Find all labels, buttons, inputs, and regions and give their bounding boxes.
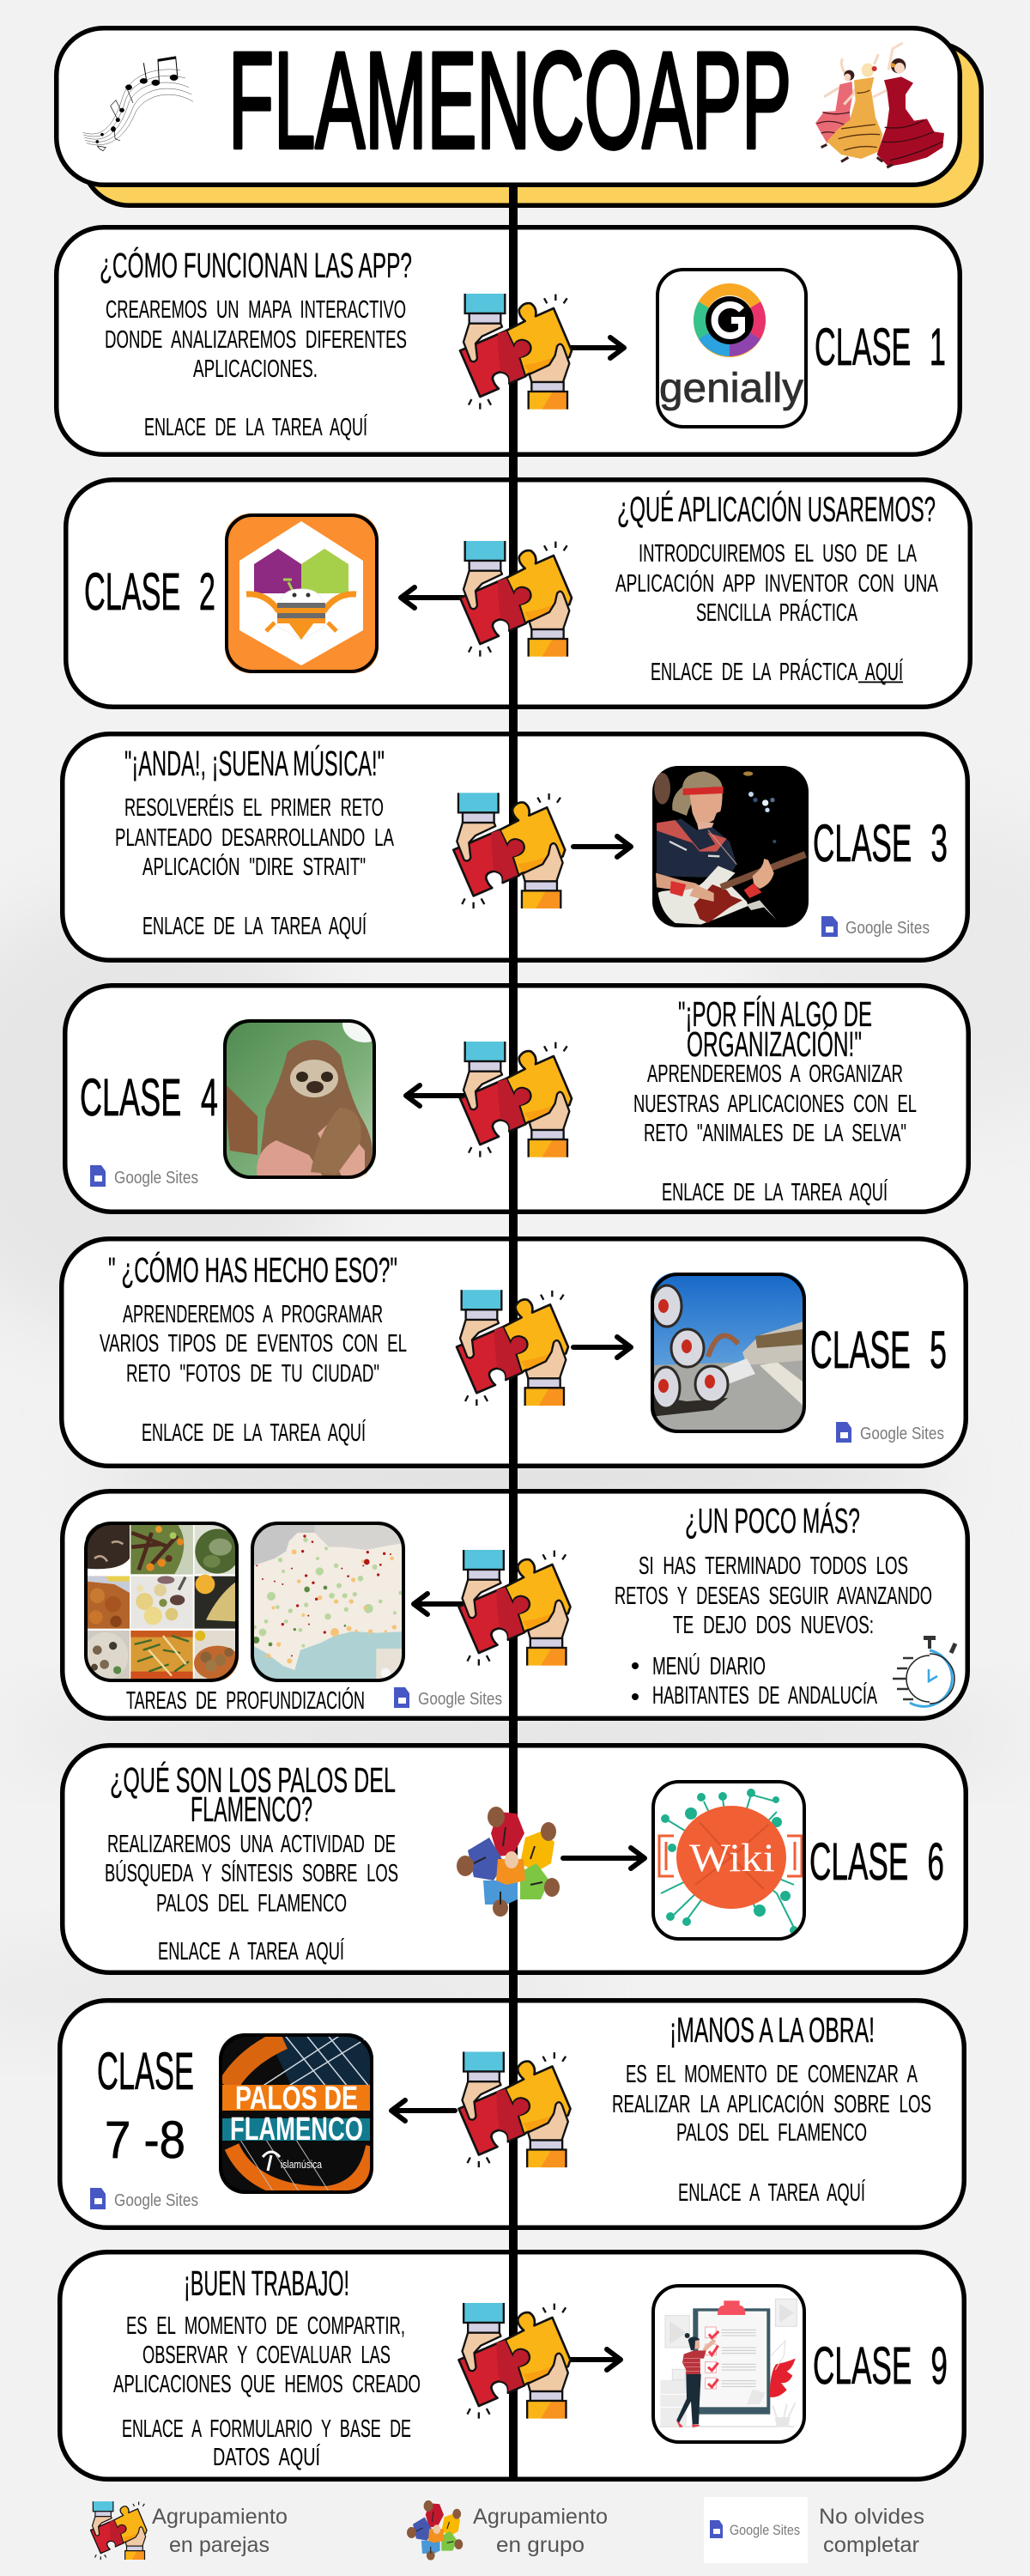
text block 6 <box>615 1552 932 1639</box>
arrow 5 <box>573 1337 631 1358</box>
text block 5 <box>100 1301 407 1388</box>
text block 9: ES EL MOMENTO DE COMPARTIR, <box>126 2312 405 2340</box>
panel 7 card <box>63 1746 966 1972</box>
arrow 8 <box>391 2100 455 2121</box>
icon: wiki logo: Wiki <box>689 1836 775 1880</box>
photo: guitarist <box>652 766 809 927</box>
text block 9: OBSERVAR Y COEVALUAR LAS <box>142 2342 391 2369</box>
header white card <box>57 28 960 185</box>
bullet list: HABITANTES DE ANDALUCÍA <box>652 1681 877 1710</box>
legend: group <box>407 2500 608 2561</box>
arrow 7 <box>563 1848 645 1868</box>
icon: flamenco dancers <box>815 43 944 167</box>
header yellow shadow <box>82 43 981 205</box>
link 8: ENLACE A TAREA AQUÍ <box>678 2178 866 2207</box>
text block 1: DONDE ANALIZAREMOS DIFERENTES <box>105 326 407 354</box>
text block 3: RESOLVERÉIS EL PRIMER RETO <box>124 793 384 822</box>
heading 7: ¿QUÉ SON LOS PALOS DEL <box>110 1760 396 1800</box>
icon: app inventor logo <box>225 513 379 673</box>
text block 8: PALOS DEL FLAMENCO <box>676 2119 867 2147</box>
icon: puzzle hands 9 <box>458 2303 570 2419</box>
image: palos de flamenco: islamúsica <box>281 2158 323 2171</box>
panel 4 card <box>65 986 968 1212</box>
icon: puzzle hands 5 <box>457 1290 568 1406</box>
text block 3: APLICACIÓN "DIRE STRAIT" <box>142 853 366 881</box>
illustration: checklist <box>651 2284 806 2444</box>
panel 3 card <box>63 734 967 960</box>
arrow 4 <box>406 1085 468 1106</box>
panel 6 card <box>63 1492 967 1718</box>
link 4: ENLACE DE LA TAREA AQUÍ <box>662 1178 888 1206</box>
text block 3 <box>115 793 394 881</box>
heading 3: "¡ANDA!, ¡SUENA MÚSICA!" <box>124 744 385 783</box>
icon: group of people <box>457 1807 560 1917</box>
text block 5: APRENDEREMOS A PROGRAMAR <box>123 1301 383 1328</box>
text block 7: REALIZAREMOS UNA ACTIVIDAD DE <box>107 1831 396 1858</box>
arrow 1 <box>566 337 624 358</box>
text block 1: APLICACIONES. <box>193 355 318 383</box>
text block 3: PLANTEADO DESARROLLANDO LA <box>115 824 394 852</box>
legend: google sites reminder: Google Sites <box>730 2522 800 2538</box>
heading 4 <box>678 994 872 1064</box>
heading 4: "¡POR FÍN ALGO DE <box>678 994 872 1034</box>
label clase 2: CLASE 2 <box>84 562 215 621</box>
timeline spine <box>509 187 518 2482</box>
icon: wiki logo <box>651 1780 806 1941</box>
panel: clase 9 <box>60 2250 964 2482</box>
legend: google sites reminder <box>704 2497 924 2563</box>
logo: google sites 5 <box>836 1422 944 1443</box>
heading 4: ORGANIZACIÓN!" <box>687 1024 862 1064</box>
text block 5: RETO "FOTOS DE TU CIUDAD" <box>126 1360 379 1388</box>
link 1: ENLACE DE LA TAREA AQUÍ <box>144 413 368 441</box>
panel: clase 5 <box>62 1236 966 1468</box>
legend: group: Agrupamiento <box>473 2505 608 2529</box>
arrow 2 <box>401 587 464 608</box>
label clases 7-8 <box>97 2042 194 2169</box>
heading 7 <box>110 1760 396 1829</box>
photo: town square <box>651 1273 806 1433</box>
label clases 7-8: 7 -8 <box>105 2111 185 2169</box>
image: palos de flamenco: PALOS DE <box>235 2081 358 2117</box>
map: andalucia <box>251 1522 405 1682</box>
link 9: ENLACE A FORMULARIO Y BASE DE <box>122 2415 411 2443</box>
panel: tareas de profundización <box>63 1489 967 1721</box>
panel: clase 4 <box>65 983 968 1214</box>
legend: pairs: Agrupamiento <box>152 2505 288 2529</box>
text block 9: APLICACIONES QUE HEMOS CREADO <box>113 2371 421 2398</box>
icon: puzzle hands 4 <box>460 1042 572 1157</box>
text block 7: PALOS DEL FLAMENCO <box>156 1890 347 1917</box>
legend: group: en grupo <box>496 2533 585 2557</box>
photo: food collage <box>83 1522 241 1682</box>
logo: google sites 4: Google Sites <box>114 1169 198 1188</box>
icon: puzzle hands 1 <box>460 294 572 410</box>
icon: stopwatch <box>893 1636 955 1706</box>
image: palos de flamenco: FLAMENCO <box>230 2111 363 2148</box>
bullet list: MENÚ DIARIO <box>652 1652 766 1680</box>
arrow 9 <box>563 2349 621 2370</box>
heading 9: ¡BUEN TRABAJO! <box>184 2263 349 2303</box>
photo: sloth <box>223 1019 376 1179</box>
legend <box>91 2497 924 2563</box>
panel 1 card <box>57 228 960 454</box>
legend: google sites reminder: No olvides <box>819 2505 924 2529</box>
logo: google sites 5: Google Sites <box>860 1425 944 1443</box>
logo: google sites 6 <box>394 1687 502 1709</box>
text block 7 <box>105 1831 398 1917</box>
legend: pairs <box>91 2501 288 2560</box>
text block 1: CREAREMOS UN MAPA INTERACTIVO <box>106 296 406 324</box>
heading 1: ¿CÓMO FUNCIONAN LAS APP? <box>100 246 412 285</box>
link 9 <box>122 2415 411 2471</box>
legend: google sites reminder: completar <box>823 2533 919 2557</box>
panel 8 card <box>60 2001 964 2227</box>
icon: puzzle hands 6 <box>458 1550 570 1666</box>
arrow 6 <box>414 1594 464 1614</box>
panel: clase 6 <box>63 1743 966 1975</box>
image: palos de flamenco <box>219 2033 373 2194</box>
heading 7: FLAMENCO? <box>191 1789 312 1829</box>
logo: google sites 8 <box>90 2188 198 2210</box>
text block 6: TE DEJO DOS NUEVOS: <box>673 1612 874 1639</box>
heading 6: ¿UN POCO MÁS? <box>685 1501 860 1540</box>
logo: google sites 3 <box>821 916 930 938</box>
text block 2 <box>615 540 938 627</box>
panel: clase 3 <box>63 732 967 963</box>
text block 8 <box>612 2061 931 2147</box>
panel: clase 2 <box>66 477 970 709</box>
text block 7: BÚSQUEDA Y SÍNTESIS SOBRE LOS <box>105 1859 398 1887</box>
heading 5: " ¿CÓMO HAS HECHO ESO?" <box>108 1250 397 1290</box>
caption: TAREAS DE PROFUNDIZACIÓN <box>126 1686 365 1715</box>
link 3: ENLACE DE LA TAREA AQUÍ <box>142 912 367 940</box>
link 9: DATOS AQUÍ <box>213 2443 321 2471</box>
text block 1 <box>105 296 407 383</box>
icon: music notes <box>83 57 193 151</box>
arrow 3 <box>573 836 631 857</box>
label clases 7-8: CLASE <box>97 2042 194 2100</box>
logo: google sites 4 <box>90 1165 198 1188</box>
icon: genially logo: genially <box>659 366 803 411</box>
text block 2: SENCILLA PRÁCTICA <box>696 598 857 627</box>
text block 9 <box>113 2312 421 2398</box>
panel 5 card <box>62 1239 966 1466</box>
logo: google sites 6: Google Sites <box>418 1690 502 1709</box>
logo: google sites 3: Google Sites <box>845 919 930 938</box>
icon: puzzle hands 2 <box>460 541 572 657</box>
text block 5: VARIOS TIPOS DE EVENTOS CON EL <box>100 1330 407 1358</box>
icon: puzzle hands 8 <box>458 2051 570 2167</box>
header banner <box>57 23 981 208</box>
label clase 4: CLASE 4 <box>80 1068 218 1127</box>
heading 8: ¡MANOS A LA OBRA! <box>670 2010 875 2050</box>
link 5: ENLACE DE LA TAREA AQUÍ <box>142 1419 367 1447</box>
logo: google sites 8: Google Sites <box>114 2191 198 2210</box>
icon: puzzle hands 3 <box>453 793 565 908</box>
panel: clases 7-8 <box>60 1998 964 2230</box>
bullet list <box>632 1652 877 1710</box>
icon: genially logo <box>657 270 806 427</box>
link 7: ENLACE A TAREA AQUÍ <box>158 1937 345 1965</box>
panel 2 card <box>66 480 970 707</box>
panel: clase 1 <box>57 225 960 457</box>
legend: pairs: en parejas <box>169 2533 270 2557</box>
text block 4 <box>633 1060 917 1147</box>
panel 9 card <box>60 2252 964 2479</box>
